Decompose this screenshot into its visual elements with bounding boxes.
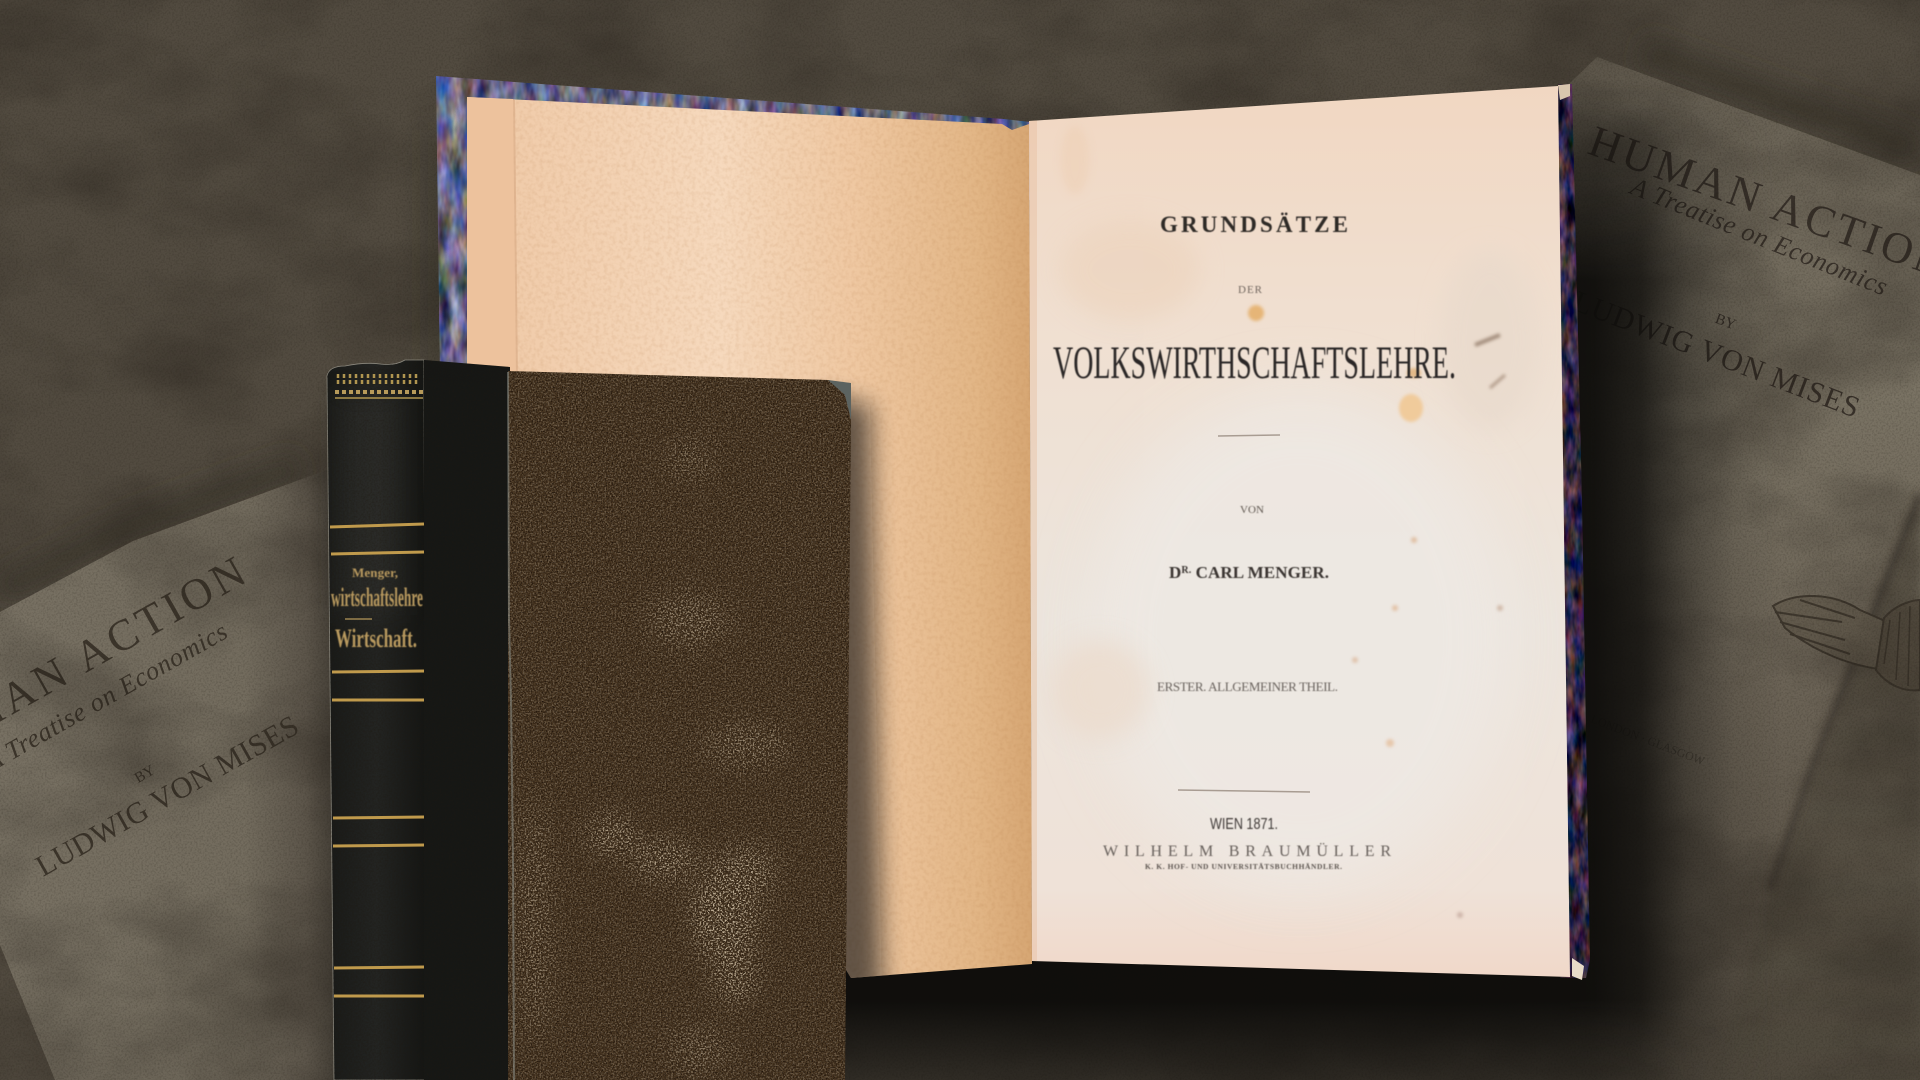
small faded publisher text: LONDON · GLASGOW	[1589, 712, 1707, 768]
author text: Ludwig von Mises right: LUDWIG VON MISES	[1568, 285, 1864, 424]
spine title text: Wirtschaft.	[335, 624, 417, 653]
author: Dr. Carl Menger: R.	[1181, 565, 1192, 576]
text: BY left: BY	[132, 762, 158, 787]
text: Wien 1871: WIEN 1871.	[1210, 816, 1278, 833]
subtitle text: A Treatise on Economics right: A Treatise on Economics	[1625, 171, 1892, 301]
spine title text: Menger,	[352, 565, 398, 580]
text: von: VON	[1240, 504, 1264, 516]
publisher: Wilhelm Braumüller: WILHELM BRAUMÜLLER	[1103, 842, 1391, 860]
left cover marbled board	[436, 76, 1030, 380]
closed book shadow on open page	[820, 395, 882, 1000]
board edge wear	[508, 372, 514, 1080]
icon: pointing hand engraving	[1773, 596, 1920, 690]
author text: Ludwig von Mises left: LUDWIG VON MISES	[30, 709, 304, 883]
publisher note: K. K. HOF- UND UNIVERSITÄTSBUCHHÄNDLER.	[1145, 862, 1342, 871]
sheet edge shade	[1640, 50, 1920, 150]
page rules	[1178, 435, 1310, 792]
page stains	[1029, 110, 1540, 970]
panel: closed book	[326, 360, 900, 1080]
marbled fore edge	[1559, 92, 1584, 962]
leather board	[508, 371, 851, 1080]
text: BY right: BY	[1713, 311, 1738, 333]
black cloth band	[424, 360, 510, 1080]
panel: right background sheet Human Action	[1500, 50, 1920, 1080]
left endpaper page	[467, 97, 1032, 978]
sheet edge line	[1770, 495, 1920, 890]
title: Volkswirthschaftslehre: VOLKSWIRTHSCHAFTSLEHRE.	[1053, 337, 1456, 389]
hinge fold strip	[467, 97, 516, 380]
author: Dr. Carl Menger: CARL MENGER.	[1191, 563, 1329, 582]
sheet body	[1500, 57, 1920, 1080]
back board edge	[1558, 84, 1590, 978]
spine joint highlight	[338, 395, 400, 615]
panel: open book	[436, 76, 1590, 980]
gold bands	[330, 524, 424, 996]
author: Dr. Carl Menger: D	[1169, 563, 1181, 582]
spine title text: wirtschaftslehre	[331, 583, 423, 612]
text: der: DER	[1238, 284, 1263, 296]
spine title text	[331, 565, 423, 653]
text: Erster Allgemeiner Theil: ERSTER. ALLGEMEINER THEIL.	[1157, 679, 1338, 694]
second sheet corner	[1710, 490, 1920, 1080]
shadow: behind the books	[420, 0, 1780, 1080]
leather grain	[500, 350, 860, 1080]
title: Grundsätze: GRUNDSÄTZE	[1160, 212, 1348, 237]
spine ornament	[335, 374, 425, 398]
right title page	[1029, 86, 1570, 977]
spine	[327, 360, 426, 1080]
sheet edge shade	[0, 465, 300, 590]
sheet body	[0, 465, 340, 1080]
panel: left background sheet Human Action	[0, 465, 340, 1080]
spine grain	[327, 363, 508, 1080]
worn corners	[1558, 84, 1570, 100]
